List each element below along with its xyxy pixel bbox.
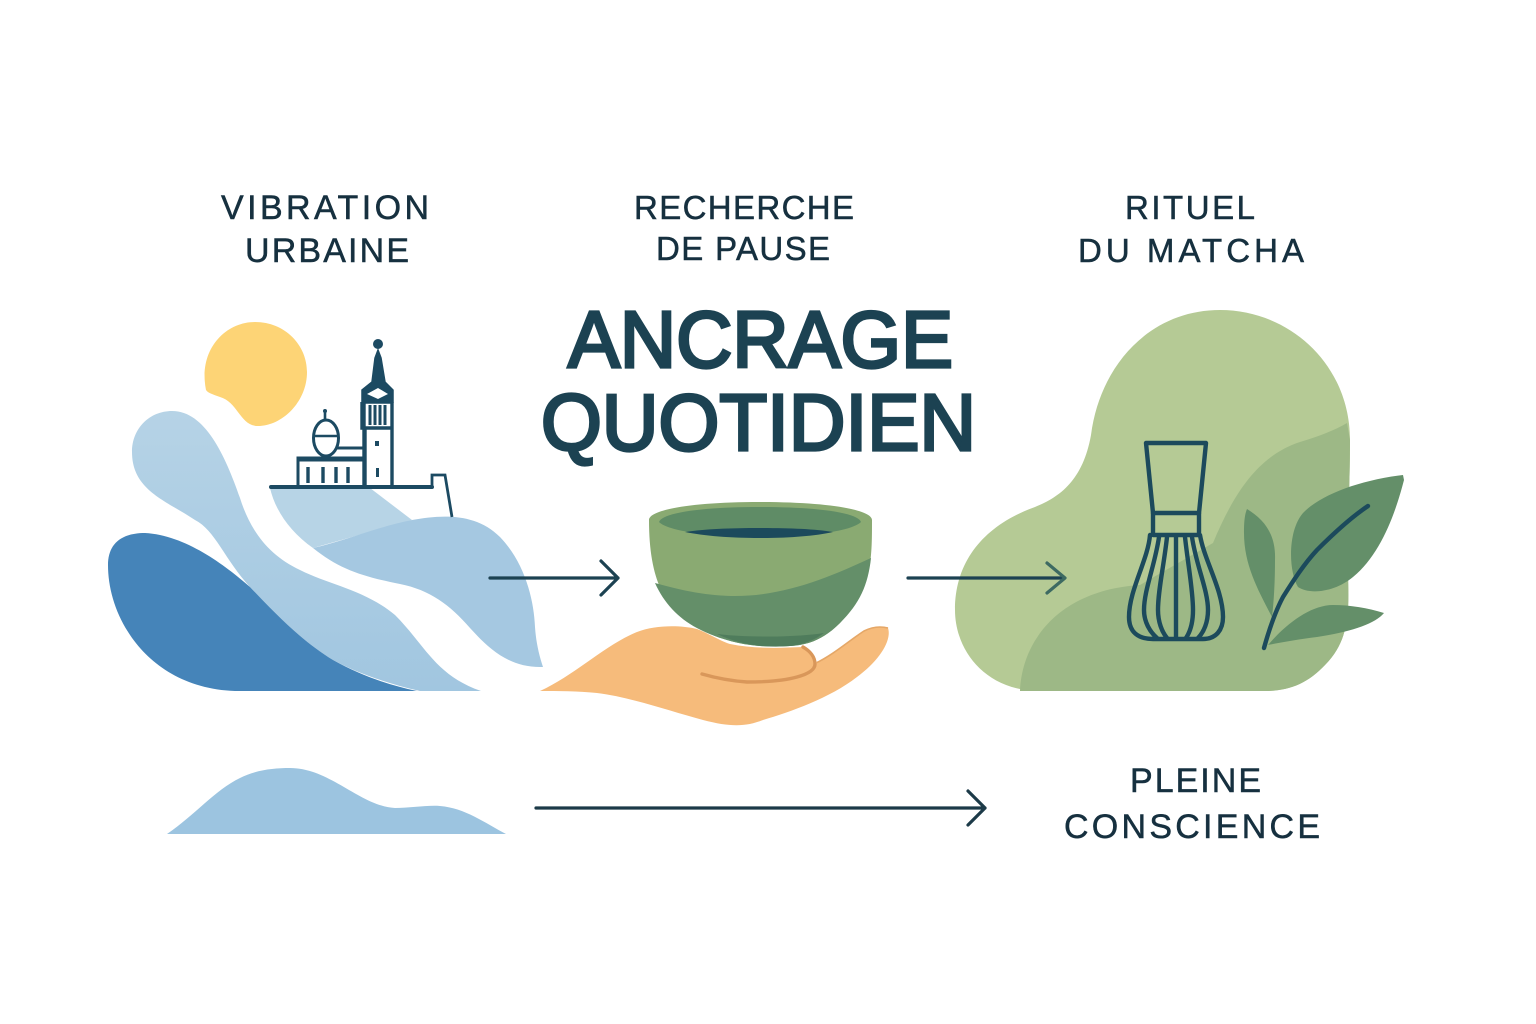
icon: tea leaves — [1244, 475, 1404, 648]
label: rituel du matcha: RITUEL — [1125, 189, 1255, 226]
matcha surface — [685, 528, 833, 538]
icon: sun — [205, 322, 307, 426]
thumb shading — [816, 627, 888, 663]
wave: pale hill below church — [270, 488, 412, 548]
icon: matcha whisk — [1129, 443, 1223, 639]
label: rituel du matcha: DU MATCHA — [1078, 232, 1304, 269]
bowl lower band — [655, 558, 871, 647]
label: recherche de pause: RECHERCHE — [634, 189, 854, 226]
illustration: hand holding bowl — [540, 502, 889, 725]
hand — [540, 626, 889, 725]
arrow: bowl to ritual — [908, 563, 1065, 593]
illustration: blue waves — [108, 411, 543, 691]
arrow: waves to bowl — [490, 561, 618, 595]
palm crease — [702, 647, 815, 682]
label: rituel du matcha — [1078, 189, 1304, 269]
illustration: green blob with whisk and leaves — [908, 310, 1404, 691]
bowl body — [649, 502, 872, 647]
title: QUOTIDIEN — [541, 378, 976, 467]
title: ANCRAGE — [568, 295, 953, 384]
label: pleine conscience: CONSCIENCE — [1064, 808, 1320, 846]
label: vibration urbaine: URBAINE — [245, 232, 409, 270]
blob shading — [1020, 423, 1350, 691]
label: recherche de pause: DE PAUSE — [656, 230, 830, 267]
arrow: long arrow to mindfulness — [536, 791, 985, 825]
label: pleine conscience: PLEINE — [1130, 762, 1261, 800]
label: pleine conscience — [1064, 762, 1320, 846]
label: vibration urbaine: VIBRATION — [221, 189, 429, 227]
shape: small blue hill — [167, 768, 506, 834]
wave: right ribbon — [313, 517, 543, 667]
bowl base shadow — [717, 633, 824, 647]
icon: church on cliff — [271, 339, 452, 517]
label: recherche de pause — [634, 189, 854, 267]
blob background — [955, 310, 1350, 691]
bowl inner — [659, 507, 861, 537]
wave: dark blue — [108, 533, 417, 691]
title — [541, 295, 976, 467]
wave: light ribbon — [132, 411, 481, 691]
label: vibration urbaine — [221, 189, 429, 270]
